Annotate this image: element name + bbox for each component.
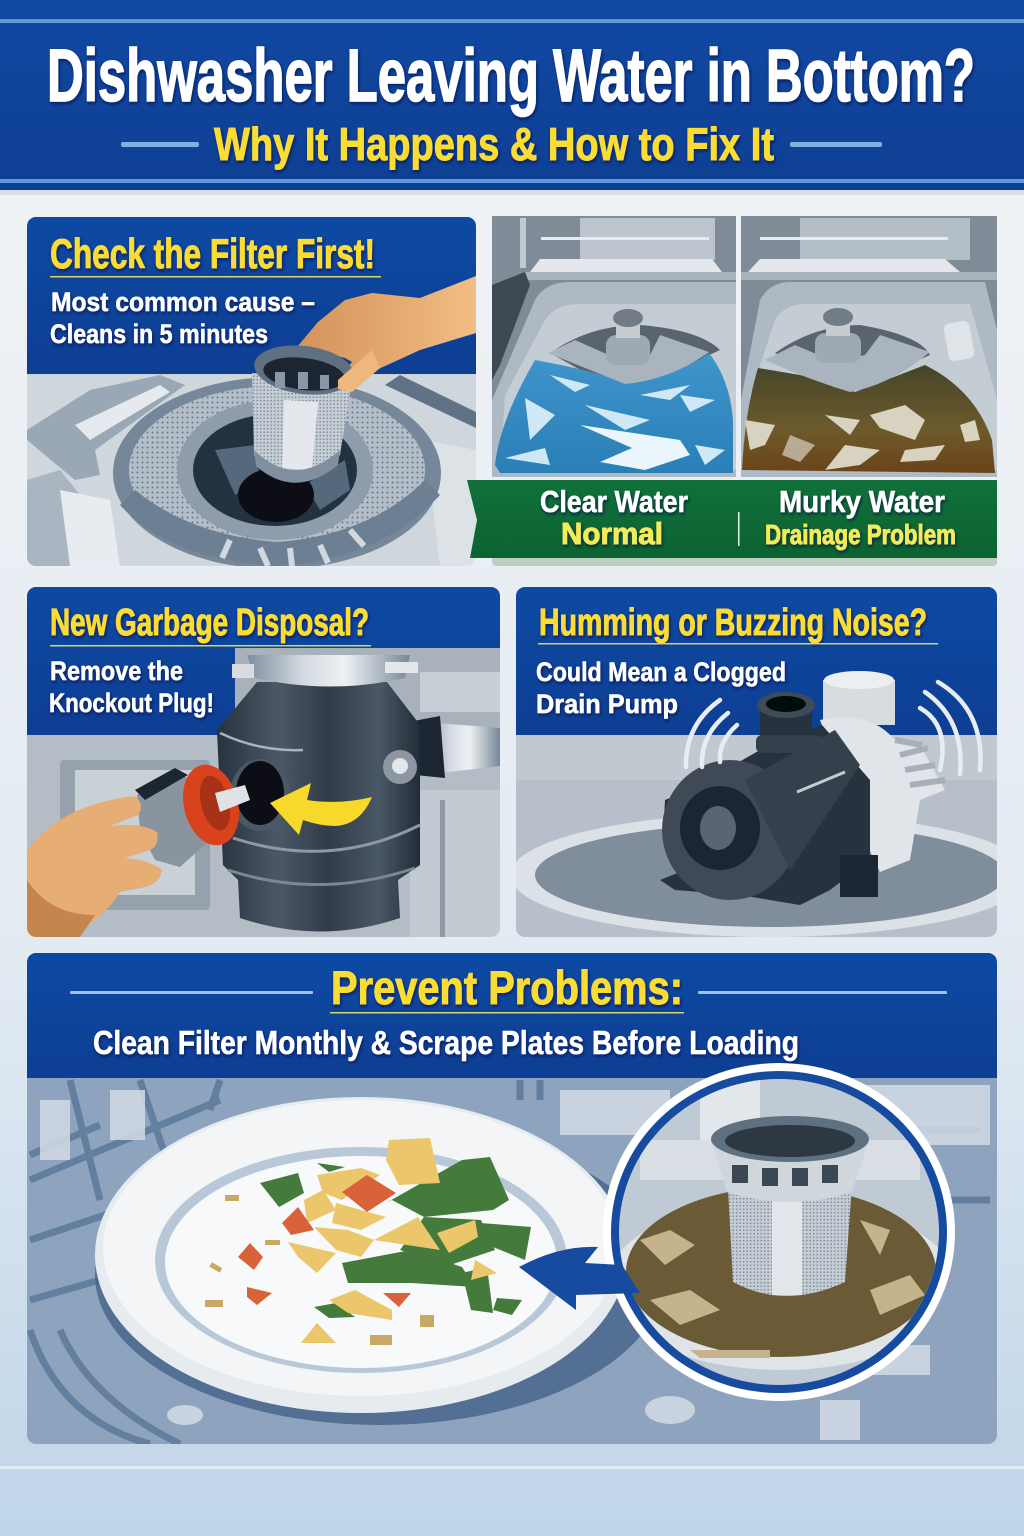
icon: blue curved arrow <box>519 1247 640 1310</box>
description: Knockout Plug! <box>49 688 214 718</box>
icon: filter basket <box>251 340 357 483</box>
icon: spray hub <box>765 308 930 392</box>
icon: spray hub <box>548 309 709 384</box>
description: Most common cause – <box>51 287 315 317</box>
label: clear water <box>540 484 688 551</box>
description: Drain Pump <box>536 689 678 719</box>
blue header area <box>27 587 500 735</box>
icon: disposal unit <box>217 655 500 932</box>
icon: sound waves left <box>686 700 737 767</box>
panel: garbage disposal <box>27 587 500 937</box>
icon: hand holding plug <box>27 796 162 937</box>
filter tub background <box>27 375 476 569</box>
subtitle: Why It Happens & How to Fix It <box>214 118 774 170</box>
blue header area <box>27 217 476 374</box>
description: Cleans in 5 minutes <box>50 319 268 349</box>
icon: water pool <box>495 353 733 473</box>
icon: plate with food scraps <box>95 1097 627 1413</box>
plate shadow <box>95 1172 640 1425</box>
description <box>536 657 786 719</box>
icon: sound waves right <box>920 682 980 774</box>
heading: New Garbage Disposal? <box>50 602 369 644</box>
panel: murky water <box>741 216 997 477</box>
icon: murky pool <box>742 365 995 473</box>
icon: drain pump <box>660 671 945 905</box>
green comparison banner <box>467 480 997 558</box>
icon: magnified filter circle <box>603 1063 956 1401</box>
header banner <box>0 0 1024 195</box>
heading: Prevent Problems: <box>331 961 683 1014</box>
label: murky water: Murky Water <box>779 484 945 519</box>
label: clear water: Clear Water <box>540 484 688 519</box>
description <box>50 292 317 347</box>
panel: clear water <box>492 216 736 477</box>
icon: knockout plug <box>135 759 250 867</box>
description: Clean Filter Monthly & Scrape Plates Before Loading <box>93 1024 799 1061</box>
icon: hand <box>297 276 476 392</box>
heading <box>70 969 947 1014</box>
panel: prevent problems <box>27 953 997 1444</box>
dishwasher rack background <box>30 1080 990 1444</box>
panel: check the filter <box>27 217 476 569</box>
label: murky water <box>765 484 956 550</box>
blue header area <box>27 953 997 1078</box>
label: murky water: Drainage Problem <box>765 519 956 550</box>
strip under water panels <box>492 550 997 566</box>
icon: thumb <box>338 350 380 392</box>
description: Could Mean a Clogged <box>536 657 786 687</box>
description <box>49 656 214 718</box>
panel: humming noise <box>510 587 1024 937</box>
icon: yellow arrow <box>270 783 372 835</box>
label: clear water: Normal <box>561 516 663 551</box>
heading: Check the Filter First! <box>50 230 375 277</box>
description: Remove the <box>50 656 183 686</box>
